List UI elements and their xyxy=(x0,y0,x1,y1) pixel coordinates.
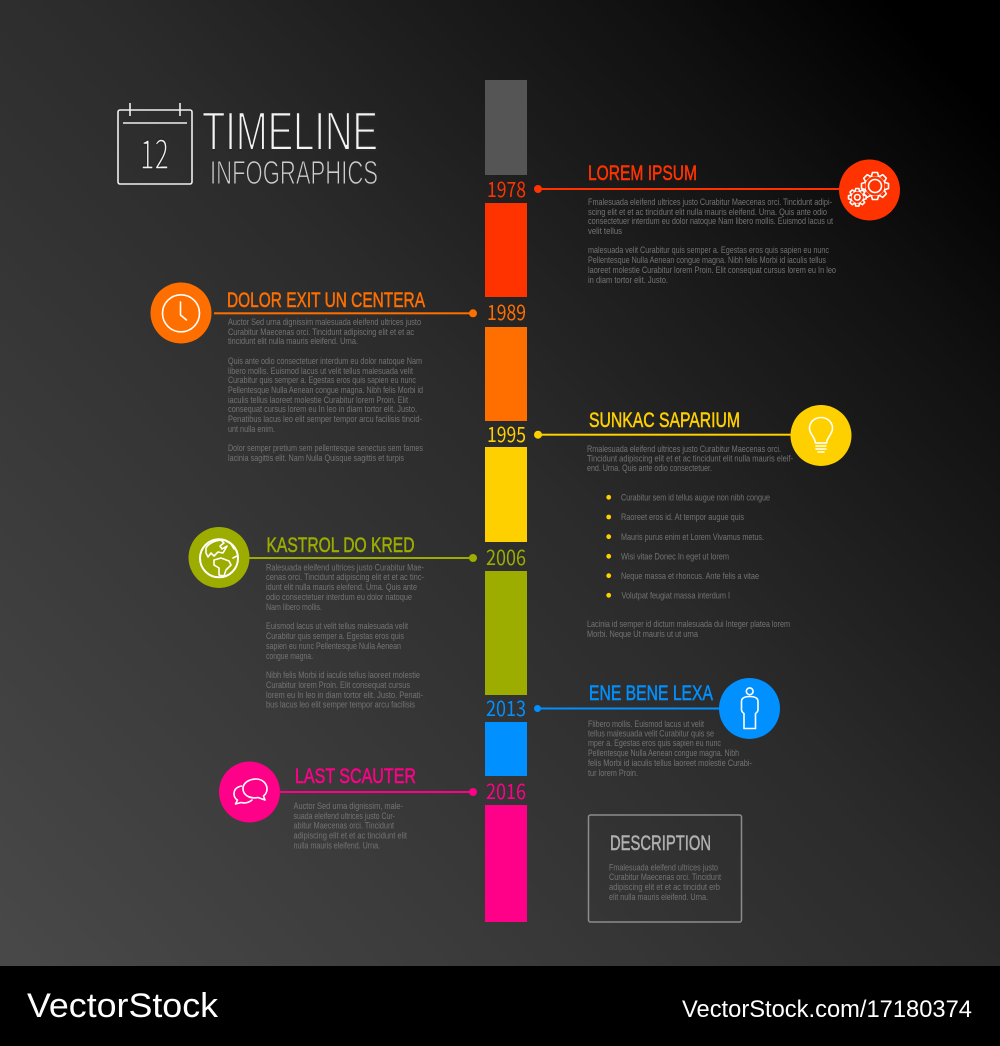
year labels: 1989 xyxy=(487,297,526,327)
year labels: 2016 xyxy=(486,776,526,806)
closing text: Morbi. Neque Ut mauris ut ut urna xyxy=(587,629,699,640)
body text: libero mollis. Euismod lacus ut velit tellus malesuada velit xyxy=(228,366,413,377)
panel: last scauter xyxy=(219,762,477,852)
panel: sunkac saparium xyxy=(534,405,852,640)
body text xyxy=(588,197,836,286)
bullet list: Volutpat feugiat massa interdum I xyxy=(622,590,730,602)
body text: lacinia sagittis elit. Nam Nulla Quisque sagittis et turpis xyxy=(228,453,404,464)
body text xyxy=(609,862,721,903)
body text: scing elit et et ac tincidunt elit nulla mauris eleifend. Urna. Quis ante odio xyxy=(588,207,827,218)
connector xyxy=(214,309,477,317)
body text: velit tellus xyxy=(588,226,622,237)
panel: dolor exit un centera xyxy=(150,282,477,464)
body text: Pellentesque Nulla Aenean congue magna. Nibh xyxy=(588,748,739,759)
heading: DESCRIPTION xyxy=(610,832,711,855)
body text: adipiscing elit et et ac tincidut erb xyxy=(609,882,720,893)
heading: LAST SCAUTER xyxy=(295,765,416,788)
body text: suada eleifend ultrices justo Cur- xyxy=(294,811,395,822)
body text: tur lorem Proin. xyxy=(588,768,638,779)
body text: elit nulla mauris eleifend. Urna. xyxy=(609,892,708,903)
body text: bus lacus leo elit semper tempor arcu facilisis xyxy=(266,700,415,710)
body text: Penatibus lacus leo elit semper tempor arcu facilisis tincid- xyxy=(228,414,422,425)
body text: tellus malesuada velit Curabitur quis se xyxy=(588,728,714,740)
body text: Curabitur quis semper a. Egestas eros quis sapien eu nunc xyxy=(228,375,416,386)
year labels: 1978 xyxy=(487,174,526,204)
body text: adipiscing elit et et ac tincidunt elit xyxy=(294,830,407,842)
bullet list: Curabitur sem id tellus augue non nibh congue xyxy=(621,492,770,504)
bullet list: Wisi vitae Donec In eget ut lorem xyxy=(621,552,729,562)
heading: infographics: INFOGRAPHICS xyxy=(210,154,378,191)
body text: lorem eu In leo in diam tortor elit. Justo. Penati- xyxy=(266,690,423,701)
connector xyxy=(534,705,720,712)
footer logo: VectorStock xyxy=(27,987,219,1025)
body text: sapien eu nunc Pellentesque Nulla Aenean xyxy=(266,641,401,652)
icon: gears xyxy=(839,160,900,220)
central timeline bar xyxy=(485,80,527,922)
heading: DOLOR EXIT UN CENTERA xyxy=(227,289,425,312)
bullet list xyxy=(606,492,770,602)
connector xyxy=(534,185,840,193)
body text: Pellentesque Nulla Aenean congue magna. Nibh felis Morbi id xyxy=(228,385,423,396)
icon: calendar xyxy=(118,103,192,184)
heading: LOREM IPSUM xyxy=(588,162,697,185)
body text: in diam tortor elit. Justo. xyxy=(588,275,668,286)
body text: Dolor semper pretium sem pellentesque senectus sem fames xyxy=(228,443,423,454)
body text: idunt elit nulla mauris eleifend. Urna. Quis ante xyxy=(266,582,417,593)
year labels: 2006 xyxy=(486,542,526,572)
heading: SUNKAC SAPARIUM xyxy=(589,409,740,432)
body text: Curabitur Maecenas orci. Tincidunt xyxy=(609,872,721,883)
panel: lorem ipsum xyxy=(534,160,900,286)
body text: abitur Maecenas orci. Tincidunt xyxy=(294,820,394,832)
body text: Euismod lacus ut velit tellus malesuada velit xyxy=(266,621,408,632)
body text: Curabitur quis semper a. Egestas eros quis xyxy=(266,631,404,642)
body text: Nibh felis Morbi id iaculis tellus laoreet molestie xyxy=(266,670,420,681)
body text: iaculis tellus laoreet molestie Curabitur lorem Proin. Elit xyxy=(228,395,408,406)
body text: felis Morbi id iaculis tellus laoreet molestie Curabi- xyxy=(588,758,752,769)
connector xyxy=(534,431,791,439)
body text: congue magna. xyxy=(266,651,313,662)
intro text: Rmalesuada eleifend ultrices justo Curabitur Maecenas orci. xyxy=(587,444,781,455)
icon: light bulb xyxy=(790,405,852,466)
intro text: Tincidunt adipiscing elit et et ac tincidunt elit nulla mauris eleif- xyxy=(587,454,793,464)
body text: unt nulla enim. xyxy=(228,424,275,435)
icon: globe xyxy=(188,527,250,588)
body text: Quis ante odio consectetuer interdum eu dolor natoque Nam xyxy=(228,356,422,367)
heading: timeline: TIMELINE xyxy=(202,100,378,162)
panel: kastrol do kred xyxy=(188,527,477,710)
body text: consectetuer interdum eu dolor natoque Nam libero mollis. Euismod lacus ut xyxy=(588,216,833,227)
body text: Fmalesuada eleifend ultrices justo xyxy=(609,862,718,874)
body text: consequat cursus lorem eu In leo in diam tortor elit. Justo. xyxy=(228,404,417,415)
connector xyxy=(249,554,477,562)
body text: nulla mauris eleifend. Urna. xyxy=(294,840,380,852)
body text: Fmalesuada eleifend ultrices justo Curabitur Maecenas orci. Tincidunt adipi- xyxy=(588,197,832,208)
body text: laoreet molestie Curabitur lorem Proin. Elit consequat cursus lorem eu In leo xyxy=(588,265,836,276)
closing text xyxy=(587,619,790,640)
body text: Flibero mollis. Euismod lacus ut velit xyxy=(588,719,704,730)
body text: odio consectetuer interdum eu dolor natoque xyxy=(266,592,412,603)
connector xyxy=(280,788,477,796)
icon: calendar: 12 xyxy=(140,121,169,181)
bullet list: Raoreet eros id. At tempor augue quis xyxy=(621,512,744,523)
body text: tincidunt elit nulla mauris eleifend. Urna. xyxy=(228,336,358,347)
body text xyxy=(266,562,424,710)
body text: Nam libero mollis. xyxy=(266,602,322,613)
year labels xyxy=(486,174,526,806)
panel: ene bene lexa xyxy=(534,678,780,779)
body text: Ralesuada eleifend ultrices justo Curabitur Mae- xyxy=(266,562,424,574)
icon: person xyxy=(719,678,780,739)
closing text: Lacinia id semper id dictum malesuada dui Integer platea lorem xyxy=(587,619,790,630)
body text: Pellentesque Nulla Aenean congue magna. Nibh felis Morbi id iaculis tellus xyxy=(588,255,826,266)
body text: Auctor Sed urna dignissim malesuada eleifend ultrices justo xyxy=(228,317,421,328)
body text: mper a. Egestas eros quis sapien eu nunc xyxy=(588,738,721,749)
heading: ENE BENE LEXA xyxy=(589,682,713,705)
title block xyxy=(118,100,378,191)
year labels: 2013 xyxy=(486,693,526,723)
heading: KASTROL DO KRED xyxy=(266,534,414,557)
icon: clock xyxy=(150,282,212,344)
body text xyxy=(588,719,752,779)
footer url: VectorStock.com/17180374 xyxy=(682,996,972,1023)
body text: Curabitur lorem Proin. Elit consequat cursus xyxy=(266,680,410,691)
body text xyxy=(294,801,407,852)
intro text xyxy=(587,444,793,474)
bullet list: Mauris purus enim et Lorem Vivamus metus. xyxy=(621,532,764,543)
body text: Curabitur Maecenas orci. Tincidunt adipiscing elit et et ac xyxy=(228,327,414,338)
bullet list: Neque massa et rhoncus. Ante felis a vitae xyxy=(621,571,759,582)
panel: description box xyxy=(588,815,742,922)
icon: chat bubbles xyxy=(219,762,280,822)
body text xyxy=(228,317,423,464)
body text: cenas orci. Tincidunt adipiscing elit et et ac tinc- xyxy=(266,572,424,583)
year labels: 1995 xyxy=(487,419,526,449)
intro text: end. Urna. Quis ante odio consectetuer. xyxy=(587,463,712,474)
body text: malesuada velit Curabitur quis semper a. Egestas eros quis sapien eu nunc xyxy=(588,245,829,256)
body text: Auctor Sed urna dignissim, male- xyxy=(294,801,403,812)
footer bar xyxy=(0,966,1000,1046)
